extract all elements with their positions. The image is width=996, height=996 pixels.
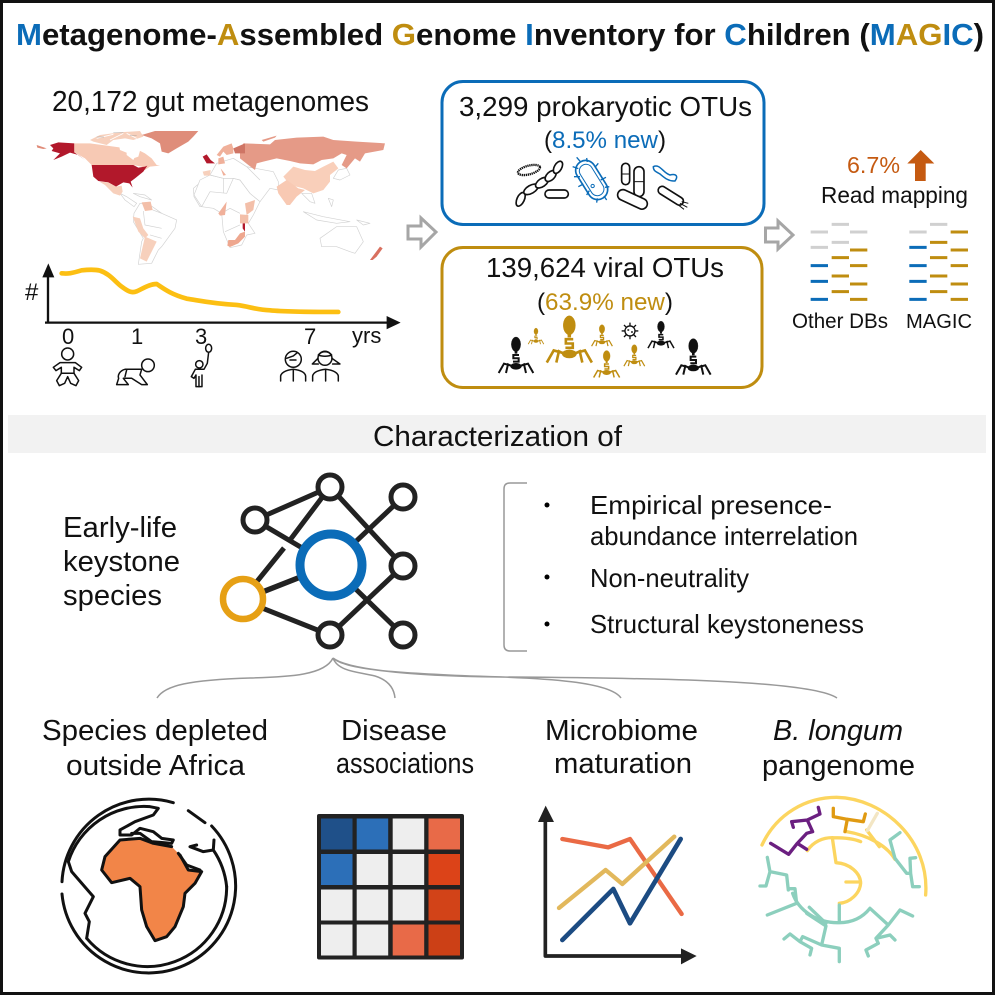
- Americas: [37, 131, 210, 264]
- label: B. longum pangenome: B. longum: [773, 715, 903, 747]
- UK: [203, 154, 215, 163]
- title: Metagenome-Assembled Genome Inventory for Children (MAGIC): [16, 17, 984, 52]
- bracket: [504, 483, 527, 651]
- label: disease associations: [336, 715, 474, 780]
- axis labels: 1: [131, 324, 143, 349]
- icon: child with balloon: [191, 344, 212, 387]
- bullet list: Structural keystoneness: [590, 609, 864, 639]
- label: species depleted: [42, 715, 268, 782]
- keystone node: [300, 534, 362, 596]
- axis labels: 0: [62, 324, 74, 349]
- icon: boy: [281, 351, 306, 381]
- Alaska: [50, 142, 85, 160]
- reads: MAGIC: [909, 224, 968, 299]
- Greenland: [142, 131, 198, 153]
- axis labels: yrs: [352, 323, 381, 348]
- world map: [37, 131, 385, 264]
- Russia: [240, 137, 385, 170]
- icon: globe with Africa: [62, 799, 236, 973]
- label: disease associations: associations: [336, 748, 474, 780]
- label: B. longum pangenome: [762, 715, 915, 782]
- label: microbiome maturation: maturation: [554, 748, 692, 780]
- phylogenetic tree: [760, 797, 926, 962]
- panel: viral OTUs: 139,624 viral OTUs: [486, 252, 724, 283]
- Africa countries: [245, 200, 255, 215]
- text: early-life keystone species: keystone: [63, 546, 180, 578]
- line chart: [538, 806, 697, 964]
- yellow clade: [762, 797, 926, 903]
- Canada: [74, 143, 160, 170]
- axis labels: [25, 279, 381, 349]
- USA: [92, 165, 147, 188]
- orange node: [223, 579, 263, 619]
- purple clade: [771, 807, 820, 854]
- icon: baby: [53, 348, 82, 386]
- orange clade: [833, 808, 865, 832]
- India: [277, 180, 305, 205]
- bullet list: Non-neutrality: [590, 563, 749, 593]
- heatmap: [317, 814, 464, 960]
- network diagram: [223, 475, 415, 647]
- bullet list: [544, 490, 864, 639]
- icon: crawling toddler: [117, 359, 154, 385]
- panel: prokaryotic OTUs: 3,299 prokaryotic OTUs: [459, 91, 752, 122]
- teal clade: [760, 833, 919, 962]
- panel: prokaryotic OTUs: (8.5% new): [544, 127, 666, 154]
- branching curves: [157, 658, 837, 698]
- abundance curve: [62, 270, 338, 312]
- Mexico: [99, 182, 123, 196]
- text: early-life keystone species: [63, 512, 180, 612]
- panel: prokaryotic OTUs: [442, 82, 764, 224]
- read mapping: Other DBs: [792, 310, 888, 333]
- reads: other DBs: [811, 224, 867, 299]
- label: microbiome maturation: [545, 715, 698, 780]
- icons: bacteria: [514, 157, 688, 211]
- axis labels: 3: [195, 324, 207, 349]
- label: microbiome maturation: Microbiome: [545, 715, 698, 747]
- heading: gut metagenomes: 20,172 gut metagenomes: [52, 86, 369, 118]
- bullet list: Empirical presence-: [590, 490, 832, 520]
- panel: viral OTUs: [442, 248, 762, 388]
- text: early-life keystone species: species: [63, 580, 162, 612]
- axis labels: 7: [304, 324, 316, 349]
- label: disease associations: Disease: [341, 715, 447, 747]
- text: early-life keystone species: Early-life: [63, 512, 177, 544]
- Eurasia Africa Oceania: [194, 136, 385, 260]
- label: species depleted: Species depleted: [42, 715, 268, 747]
- China: [283, 162, 338, 193]
- band: characterization: Characterization of: [373, 421, 623, 453]
- icons: children by age: [53, 344, 340, 387]
- read mapping: Read mapping: [821, 182, 968, 208]
- axes: [45, 272, 388, 323]
- band: characterization: [8, 415, 986, 453]
- bullet list: abundance interrelation: [590, 521, 858, 551]
- read mapping: [792, 150, 972, 333]
- icon: girl: [312, 351, 340, 381]
- label: B. longum pangenome: pangenome: [762, 750, 915, 782]
- age chart: [42, 263, 401, 329]
- arrow: to read mapping: [766, 221, 793, 249]
- arrow: to OTUs: [408, 218, 436, 247]
- axis labels: #: [25, 279, 39, 306]
- icon: up arrow: [907, 150, 934, 181]
- read mapping: 6.7%: [847, 152, 900, 178]
- icons: phages: [499, 316, 711, 377]
- South America countries: [133, 217, 148, 238]
- read mapping: MAGIC: [906, 311, 972, 333]
- label: species depleted: outside Africa: [66, 750, 246, 782]
- New Zealand: [370, 247, 383, 260]
- panel: viral OTUs: (63.9% new): [537, 289, 673, 316]
